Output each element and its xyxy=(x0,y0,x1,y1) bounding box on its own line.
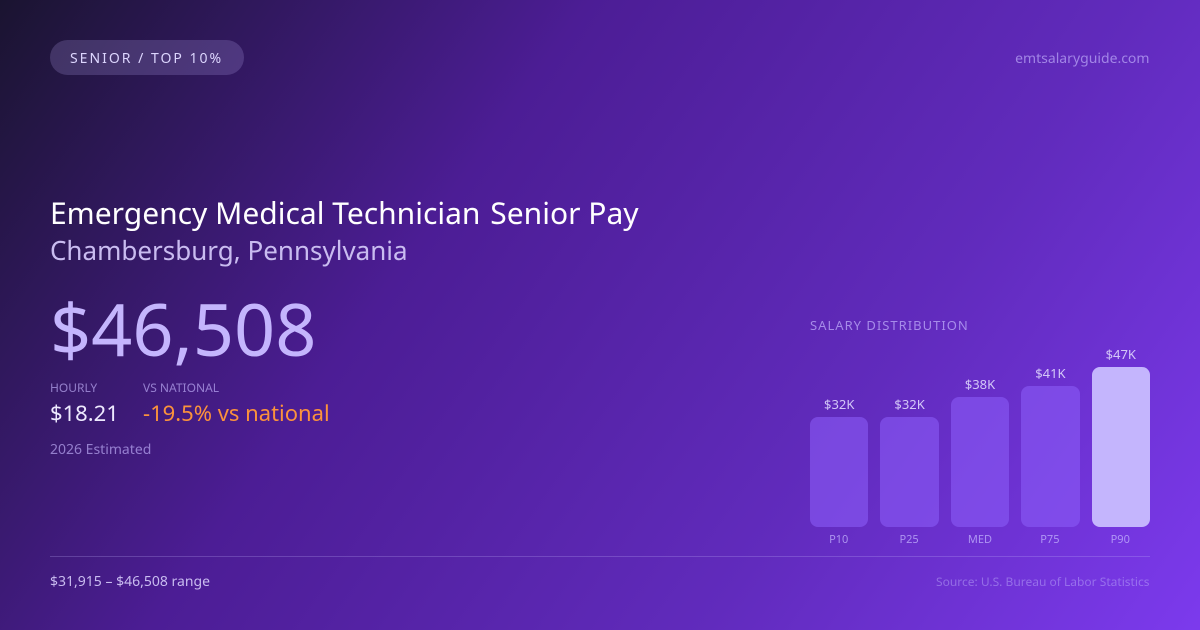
label P25: P25 xyxy=(899,532,919,547)
bar P90 xyxy=(1092,367,1150,527)
vs national value: -19.5% vs national xyxy=(143,398,330,428)
stat: vs national xyxy=(143,379,330,428)
stat: hourly xyxy=(50,379,119,428)
badge text: SENIOR / TOP 10% xyxy=(70,49,223,68)
headline salary: $46,508 xyxy=(50,280,316,378)
badge: senior / top 10% xyxy=(50,40,244,75)
value median: $38K xyxy=(965,375,995,393)
hourly value: $18.21 xyxy=(50,398,119,428)
title: Emergency Medical Technician Senior Pay xyxy=(50,192,639,233)
chart: salary distribution xyxy=(810,316,1150,547)
chart heading: SALARY DISTRIBUTION xyxy=(810,316,969,334)
value P25: $32K xyxy=(894,395,925,413)
value P90: $47K xyxy=(1106,345,1136,363)
salary range: $31,915 – $46,508 range xyxy=(50,572,210,591)
location subtitle: Chambersburg, Pennsylvania xyxy=(50,232,408,268)
bar P10 xyxy=(810,417,868,527)
label P90: P90 xyxy=(1111,532,1130,547)
vs national label: VS NATIONAL xyxy=(143,379,219,396)
value P75: $41K xyxy=(1035,364,1066,382)
label P75: P75 xyxy=(1040,532,1060,547)
value P10: $32K xyxy=(824,395,854,413)
site name: emtsalaryguide.com xyxy=(1015,49,1150,68)
hourly label: HOURLY xyxy=(50,379,97,396)
bar P25 xyxy=(880,417,939,527)
source: Source: U.S. Bureau of Labor Statistics xyxy=(936,573,1150,590)
bar median xyxy=(951,397,1009,527)
year note: 2026 Estimated xyxy=(50,440,151,459)
label P10: P10 xyxy=(829,532,848,547)
label median: MED xyxy=(968,532,992,547)
bar P75 xyxy=(1021,386,1080,527)
